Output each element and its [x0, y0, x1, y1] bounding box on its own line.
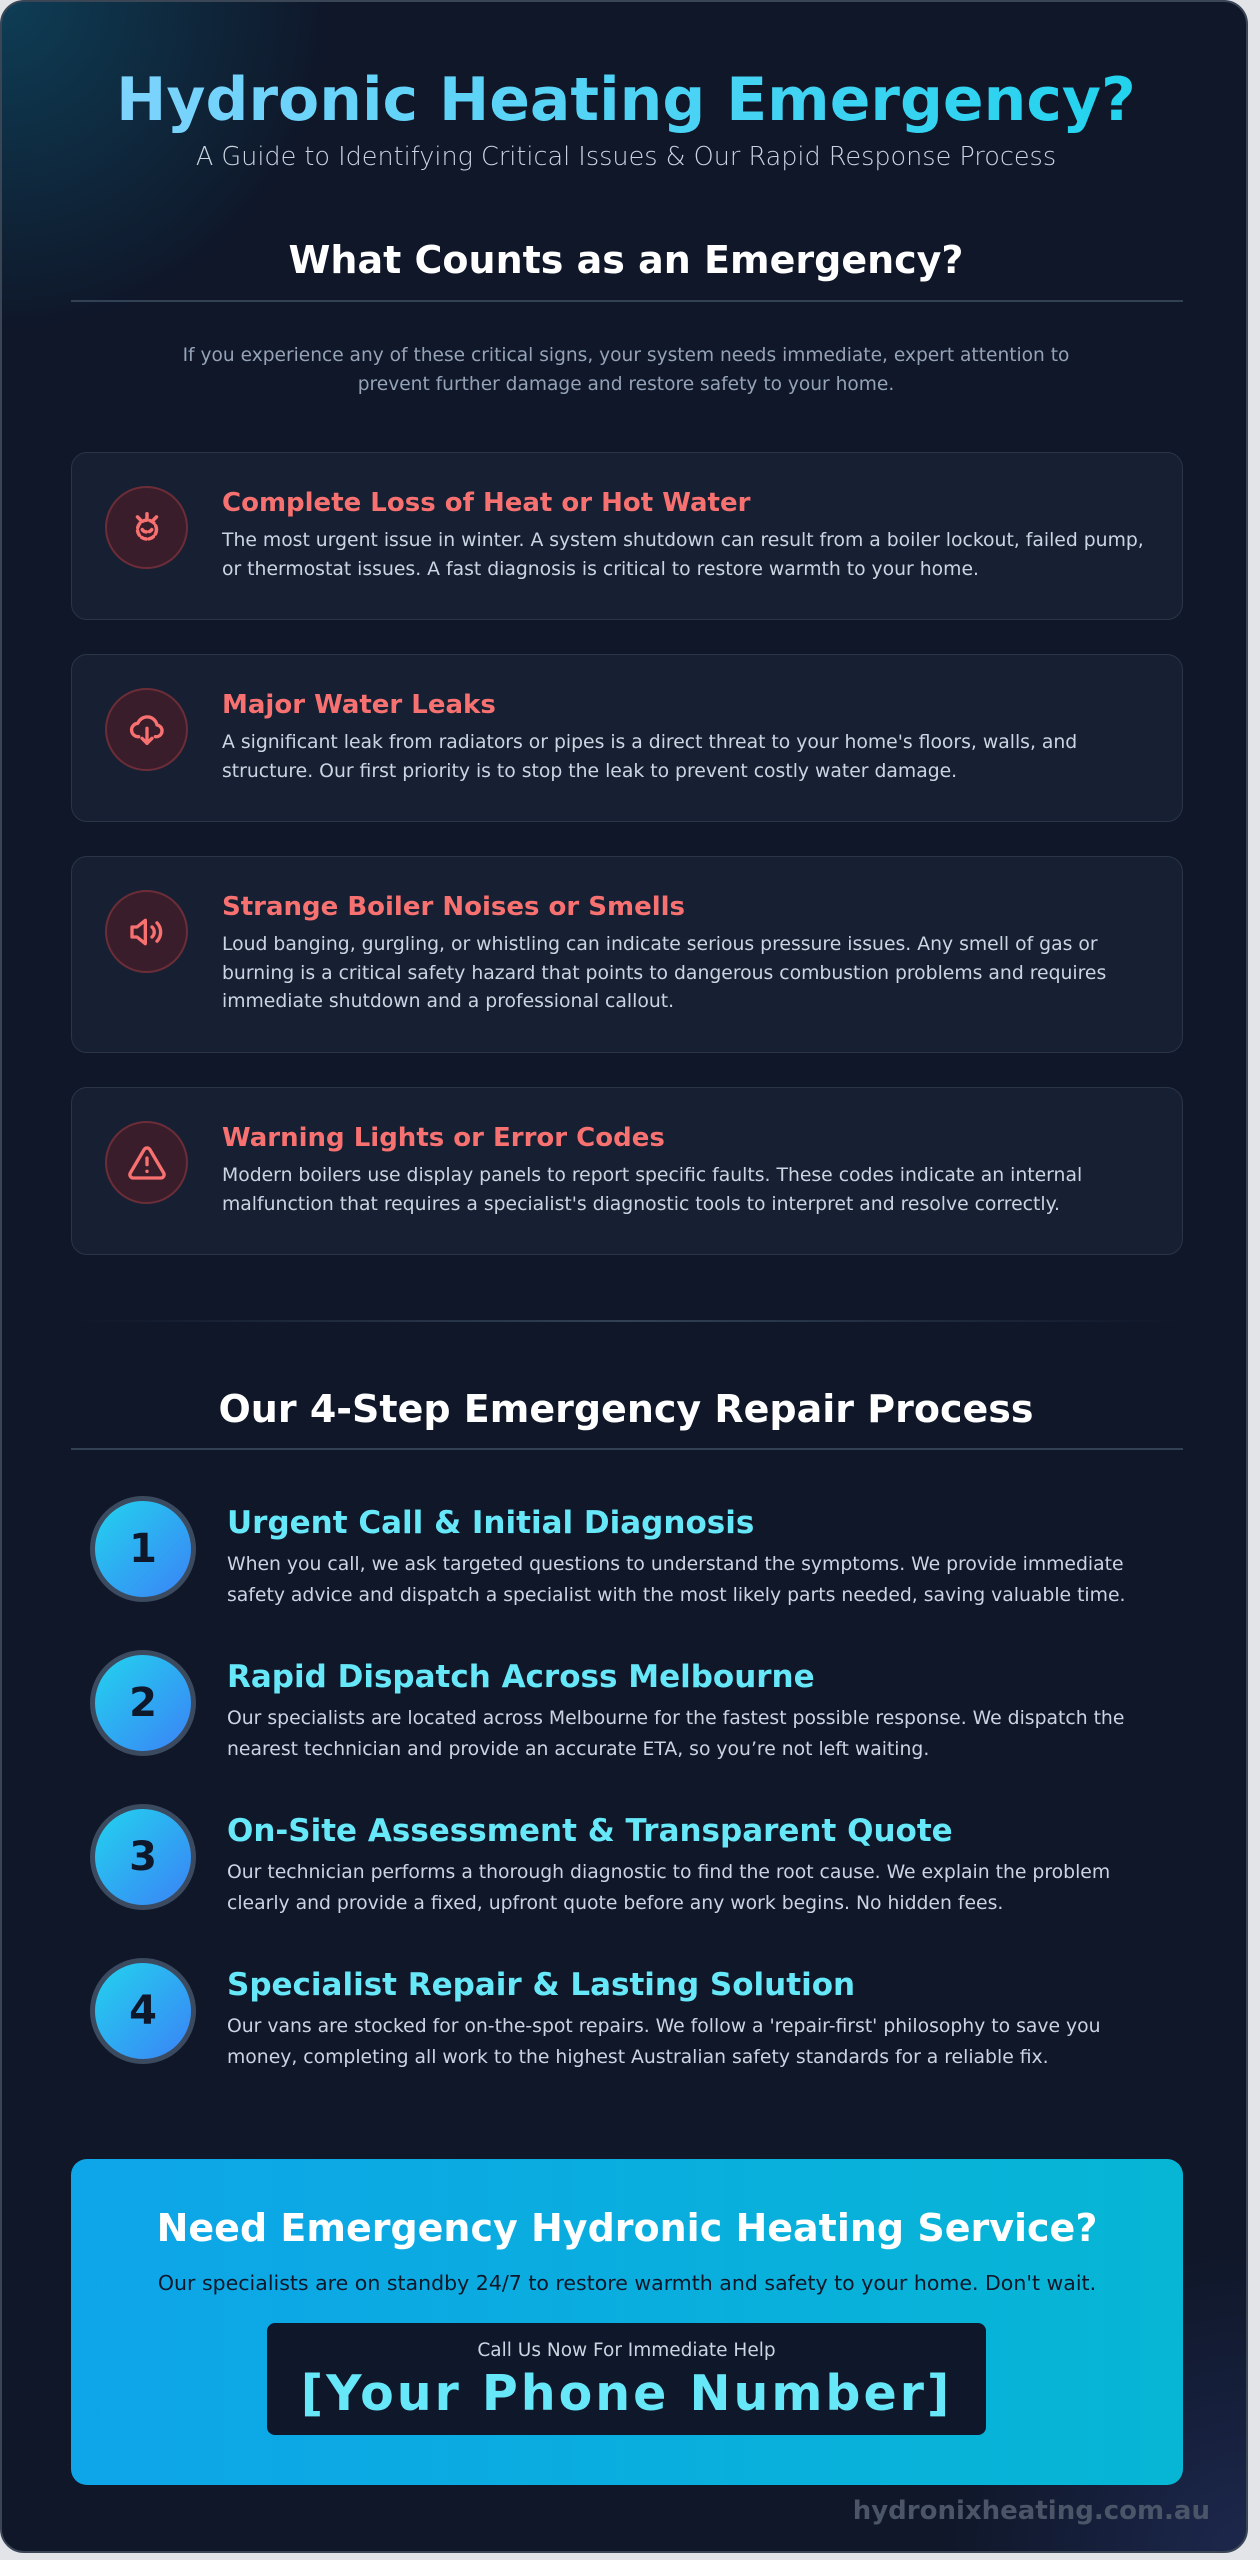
step title: On-Site Assessment & Transparent Quote [227, 1813, 953, 1849]
panel: warning lights [71, 1087, 1183, 1255]
intro text: If you experience any of these critical signs, your system needs immediate, expert attention to [183, 345, 1069, 366]
step description [227, 1708, 1124, 1760]
callout: CTA panel [71, 2159, 1183, 2485]
heading: Complete Loss of Heat or Hot Water [222, 488, 750, 518]
panel: noises or smells [71, 856, 1183, 1053]
description: malfunction that requires a specialist's diagnostic tools to interpret and resolve correctly. [222, 1194, 1060, 1214]
number badge 1 [90, 1496, 196, 1602]
step description [227, 1862, 1110, 1914]
CTA text: Our specialists are on standby 24/7 to restore warmth and safety to your home. Don't wait. [158, 2271, 1096, 2295]
description: or thermostat issues. A fast diagnosis is critical to restore warmth to your home. [222, 558, 979, 580]
step title: Specialist Repair & Lasting Solution [227, 1967, 855, 2003]
step description: safety advice and dispatch a specialist with the most likely parts needed, saving valuable time. [227, 1584, 1125, 1606]
heading: Warning Lights or Error Codes [222, 1123, 665, 1153]
description: structure. Our first priority is to stop the leak to prevent costly water damage. [222, 760, 957, 782]
step description: clearly and provide a fixed, upfront quote before any work begins. No hidden fees. [227, 1892, 1003, 1914]
heading: Major Water Leaks [222, 690, 496, 720]
heading: Strange Boiler Noises or Smells [222, 892, 685, 922]
step 3 [90, 1804, 1110, 1914]
number badge 3 [90, 1804, 196, 1910]
panel: loss of heat [71, 452, 1183, 620]
step description [227, 1554, 1125, 1606]
description: The most urgent issue in winter. A system shutdown can result from a boiler lockout, failed pump, [222, 530, 1144, 551]
description: burning is a critical safety hazard that points to dangerous combustion problems and requires [222, 962, 1106, 984]
description [222, 732, 1077, 782]
number badge 2 [90, 1650, 196, 1756]
number badge 3: 3 [129, 1834, 157, 1880]
description: immediate shutdown and a professional callout. [222, 991, 674, 1012]
icon: speaker [105, 890, 188, 973]
number badge 4 [90, 1958, 196, 2064]
footer website: hydronixheating.com.au [853, 2496, 1210, 2526]
step description: Our specialists are located across Melbourne for the fastest possible response. We dispatch the [227, 1708, 1124, 1729]
number badge 1: 1 [129, 1526, 157, 1572]
description: Modern boilers use display panels to report specific faults. These codes indicate an internal [222, 1165, 1082, 1186]
CTA heading: Need Emergency Hydronic Heating Service? [157, 2206, 1097, 2250]
description: A significant leak from radiators or pipes is a direct threat to your home's floors, walls, and [222, 732, 1077, 753]
icon: cloud drip [105, 688, 188, 771]
heading: what counts as an emergency: What Counts as an Emergency? [289, 238, 963, 282]
step description: Our vans are stocked for on-the-spot repairs. We follow a 'repair-first' philosophy to save you [227, 2016, 1101, 2037]
step title: Rapid Dispatch Across Melbourne [227, 1659, 815, 1695]
phone box: [Your Phone Number] [301, 2365, 952, 2422]
intro text [183, 345, 1069, 395]
title: Hydronic Heating Emergency? [116, 65, 1136, 135]
number badge 4: 4 [129, 1988, 157, 2034]
intro text: prevent further damage and restore safety to your home. [358, 374, 894, 395]
heading: 4-step process: Our 4-Step Emergency Repair Process [218, 1387, 1034, 1431]
step description: money, completing all work to the highest Australian safety standards for a reliable fix. [227, 2046, 1049, 2068]
icon: warning triangle [105, 1121, 188, 1204]
subtitle: A Guide to Identifying Critical Issues & Our Rapid Response Process [196, 142, 1056, 172]
phone box: Call Us Now For Immediate Help [477, 2340, 776, 2361]
icon: fire/heat [105, 486, 188, 569]
phone box [267, 2323, 986, 2435]
step description: Our technician performs a thorough diagnostic to find the root cause. We explain the problem [227, 1862, 1110, 1883]
step description: nearest technician and provide an accurate ETA, so you’re not left waiting. [227, 1738, 929, 1760]
step description [227, 2016, 1101, 2068]
step title: Urgent Call & Initial Diagnosis [227, 1505, 754, 1541]
step 4 [90, 1958, 1101, 2068]
step description: When you call, we ask targeted questions to understand the symptoms. We provide immediate [227, 1554, 1124, 1575]
step 2 [90, 1650, 1124, 1760]
number badge 2: 2 [129, 1680, 157, 1726]
description [222, 530, 1144, 580]
panel: water leaks [71, 654, 1183, 822]
description: Loud banging, gurgling, or whistling can indicate serious pressure issues. Any smell of gas or [222, 934, 1098, 955]
description [222, 934, 1106, 1012]
description [222, 1165, 1082, 1214]
step 1 [90, 1496, 1125, 1606]
